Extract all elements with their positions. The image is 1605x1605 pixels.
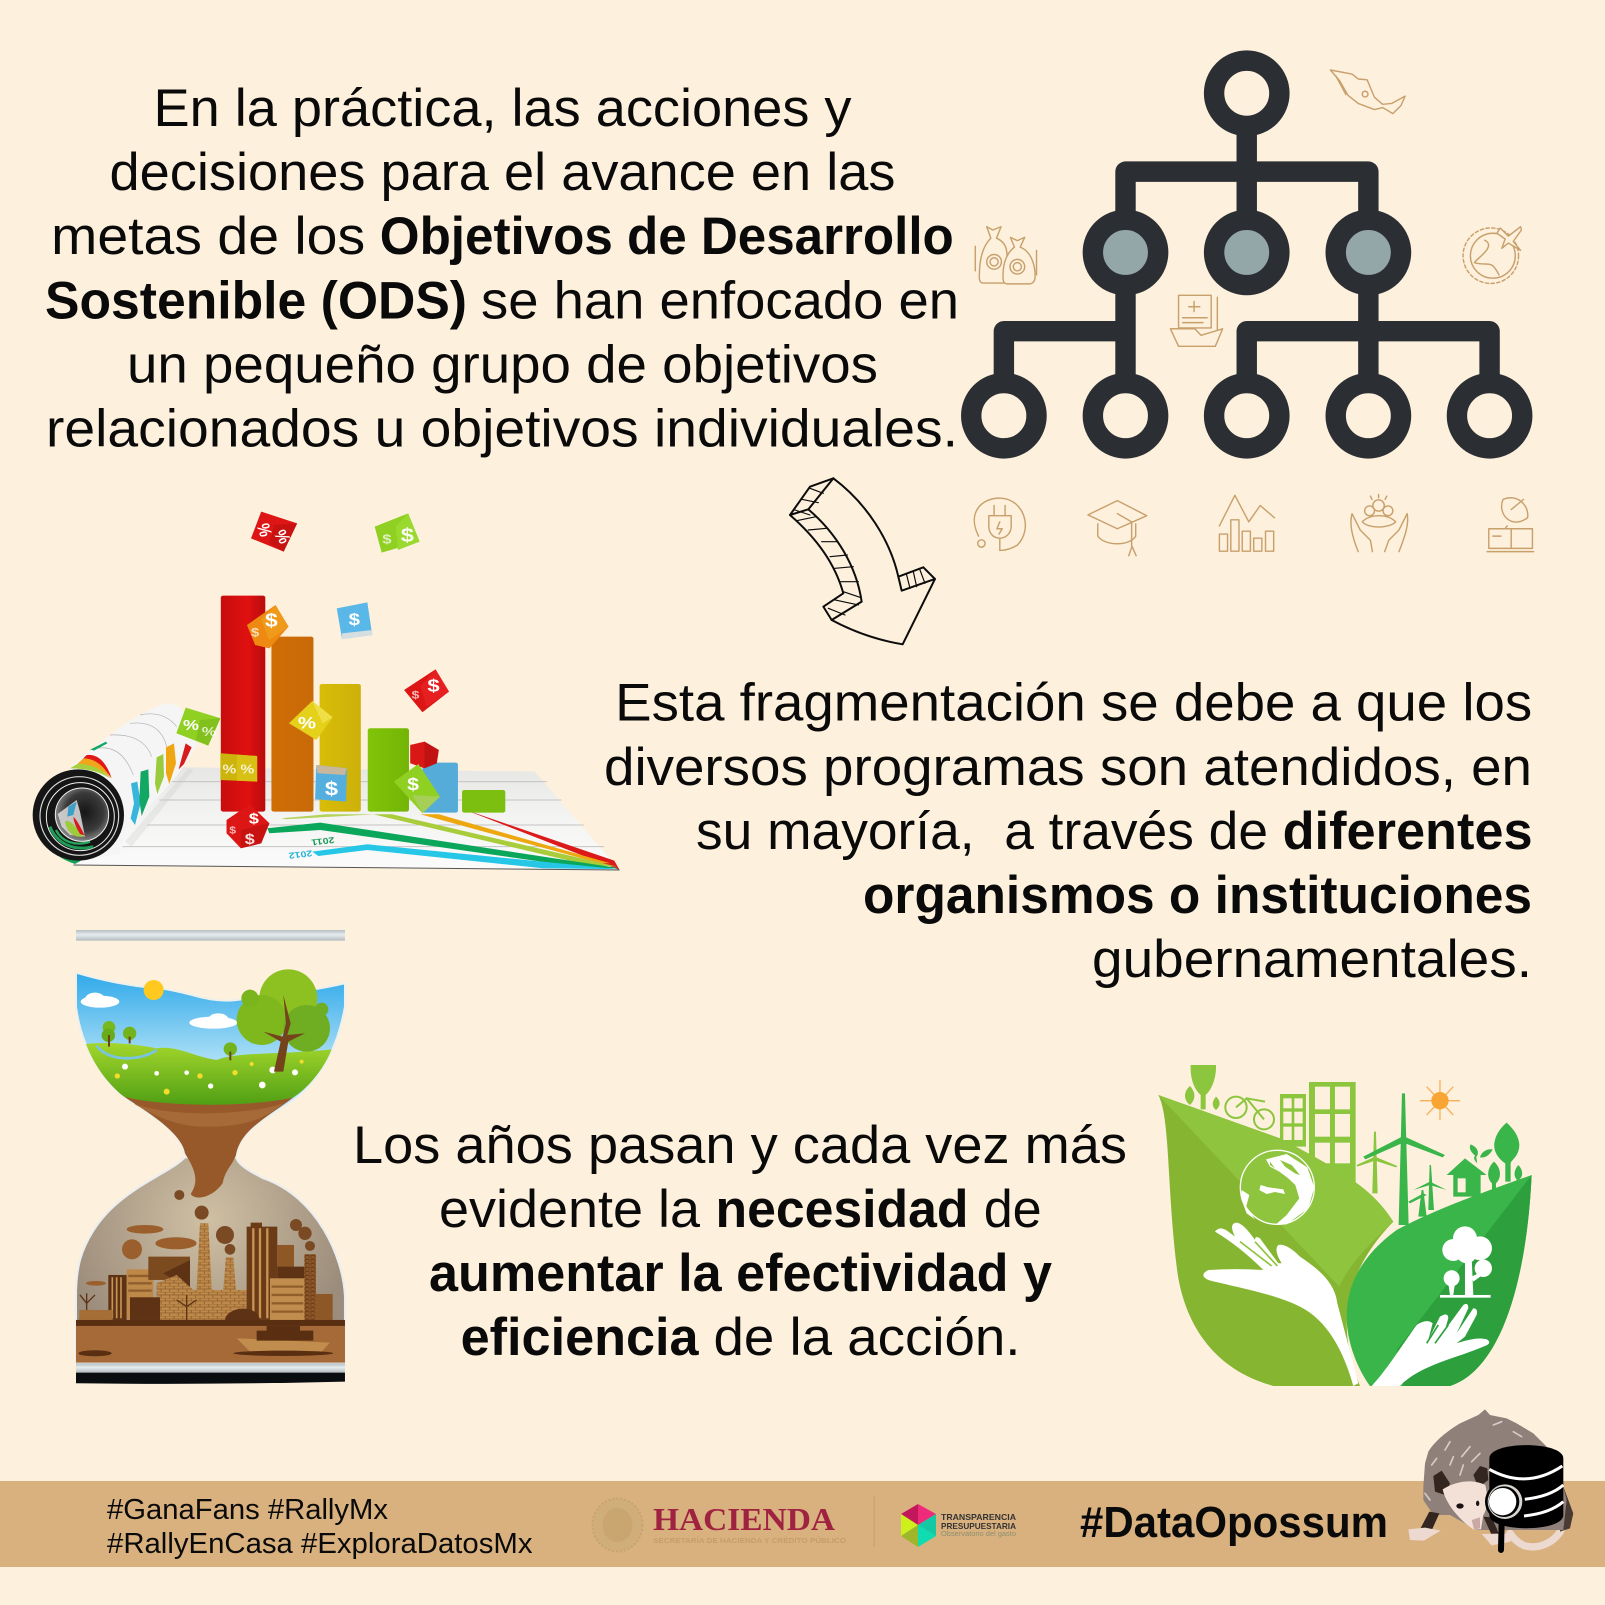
right skyline xyxy=(1363,1093,1522,1225)
dice: $ xyxy=(251,626,260,639)
icon: power plug xyxy=(974,498,1025,550)
text block: ODS intro: Sostenible (ODS) xyxy=(45,271,467,330)
text block: ODS intro: un pequeño grupo de objetivos xyxy=(127,336,878,394)
top glass cap xyxy=(76,930,345,941)
icon: graduation cap xyxy=(1088,501,1147,556)
illustration: green leaves with city and hands xyxy=(1158,1065,1532,1386)
database xyxy=(1489,1445,1563,1528)
head xyxy=(1443,1481,1487,1529)
text block: need for efficiency xyxy=(353,1116,1127,1367)
text block: need for efficiency: Los años pasan y cada vez más xyxy=(353,1116,1127,1175)
icon: chart trend xyxy=(1219,495,1274,551)
right leaf xyxy=(1347,1175,1532,1386)
dice: $ xyxy=(325,777,338,799)
dice: $ xyxy=(349,610,361,629)
text block: ODS intro: decisiones para el avance en las xyxy=(110,143,896,202)
icon: map of Mexico xyxy=(1330,70,1405,114)
footer divider xyxy=(874,1496,875,1547)
lower bulb: polluted city xyxy=(76,1157,345,1363)
icon: medical folder xyxy=(1170,295,1223,346)
hexagon mark xyxy=(901,1504,936,1547)
emblem xyxy=(592,1498,642,1552)
logo: Transparencia Presupuestaria: Observatorio del gasto xyxy=(941,1531,1016,1538)
hand-drawn arrow xyxy=(790,478,935,644)
logo: Transparencia Presupuestaria xyxy=(901,1504,1016,1547)
dice: $ xyxy=(427,676,440,696)
bottom glass cap xyxy=(76,1363,345,1384)
dice: % xyxy=(269,527,295,547)
text block: fragmentation: diferentes xyxy=(1283,802,1533,861)
text block: fragmentation: organismos o instituciones xyxy=(863,866,1532,925)
footer hashtags: #GanaFans #RallyMx xyxy=(107,1494,389,1526)
dice: % xyxy=(240,762,255,776)
logo: Hacienda: HACIENDA xyxy=(653,1501,835,1537)
left skyline xyxy=(1185,1065,1397,1193)
right hand xyxy=(1372,1304,1489,1386)
dice: % xyxy=(298,713,316,732)
body xyxy=(1423,1409,1567,1530)
dice xyxy=(176,512,449,848)
text block: fragmentation xyxy=(604,674,1533,989)
text block: fragmentation: diversos programas son atendidos, en xyxy=(604,738,1532,797)
dice: % xyxy=(183,717,199,734)
text block: ODS intro: En la práctica, las acciones y xyxy=(154,79,852,138)
dice: $ xyxy=(245,831,255,848)
tree icon xyxy=(1440,1226,1492,1298)
text block: need for efficiency: eficiencia xyxy=(461,1308,699,1367)
illustration: 3D bar chart with dice xyxy=(33,512,620,870)
upper bulb: landscape xyxy=(76,969,345,1198)
mascot: opossum with database and magnifier xyxy=(1408,1409,1573,1550)
dice: % xyxy=(252,522,276,539)
text block: ODS intro: Objetivos de Desarrollo xyxy=(380,207,954,266)
bars xyxy=(221,596,505,813)
front legs and paws xyxy=(1420,1512,1439,1533)
dice: % xyxy=(222,762,237,776)
dice: $ xyxy=(265,611,278,631)
logo: Hacienda xyxy=(592,1498,846,1552)
icon: globe and plane xyxy=(1463,227,1521,283)
chart paper and ribbons: 2011 xyxy=(310,834,335,847)
hierarchy nodes xyxy=(971,61,1522,448)
text block: fragmentation: gubernamentales. xyxy=(1092,930,1532,989)
icon: money bags xyxy=(975,227,1037,284)
chart paper and ribbons: 2012 xyxy=(288,848,313,860)
text block: ODS intro: metas de los xyxy=(51,207,365,266)
text block: fragmentation: Esta fragmentación se debe a que los xyxy=(615,674,1532,733)
icon: hands and people xyxy=(1351,494,1408,552)
paper roll xyxy=(33,703,197,864)
text block: ODS intro xyxy=(45,79,959,459)
dice: $ xyxy=(407,775,419,794)
ears xyxy=(1433,1471,1450,1495)
globe xyxy=(1240,1150,1314,1224)
logo: Transparencia Presupuestaria: TRANSPARENCIA xyxy=(941,1512,1016,1522)
footer hashtags xyxy=(107,1494,533,1560)
footer hashtags: #RallyEnCasa #ExploraDatosMx xyxy=(107,1528,533,1560)
left hand xyxy=(1203,1223,1358,1386)
text block: need for efficiency: necesidad xyxy=(716,1180,968,1239)
tail xyxy=(1510,1525,1563,1547)
text block: ODS intro: se han enfocado en xyxy=(481,271,959,330)
dice: $ xyxy=(412,688,419,701)
text block: need for efficiency: de la acción. xyxy=(714,1308,1020,1367)
dice: $ xyxy=(401,524,414,546)
hashtag DataOpossum: #DataOpossum xyxy=(1080,1498,1388,1547)
sun xyxy=(1420,1080,1460,1120)
footer band xyxy=(0,1481,1605,1567)
hierarchy connectors xyxy=(1004,93,1490,416)
text block: fragmentation: su mayoría, a través de xyxy=(696,802,1268,861)
dice: $ xyxy=(249,811,259,827)
logo: Transparencia Presupuestaria: PRESUPUESTARIA xyxy=(941,1521,1016,1531)
text block: need for efficiency: de xyxy=(984,1180,1042,1239)
left leaf xyxy=(1158,1095,1393,1386)
dice: $ xyxy=(229,825,237,836)
text block: need for efficiency: aumentar la efectividad y xyxy=(429,1244,1052,1303)
text block: need for efficiency: evidente la xyxy=(439,1180,701,1239)
magnifier xyxy=(1485,1482,1525,1550)
org chart with surrounding icons xyxy=(971,61,1534,556)
chart paper and ribbons xyxy=(73,767,620,870)
back leg xyxy=(1560,1487,1573,1532)
illustration: hourglass xyxy=(76,930,345,1384)
logo: Hacienda: SECRETARÍA DE HACIENDA Y CRÉDITO PÚBLICO xyxy=(653,1536,846,1545)
icon: satellite dish xyxy=(1487,498,1534,552)
text block: ODS intro: relacionados u objetivos individuales. xyxy=(46,400,958,459)
dice: % xyxy=(202,725,216,740)
dice: $ xyxy=(382,533,392,547)
